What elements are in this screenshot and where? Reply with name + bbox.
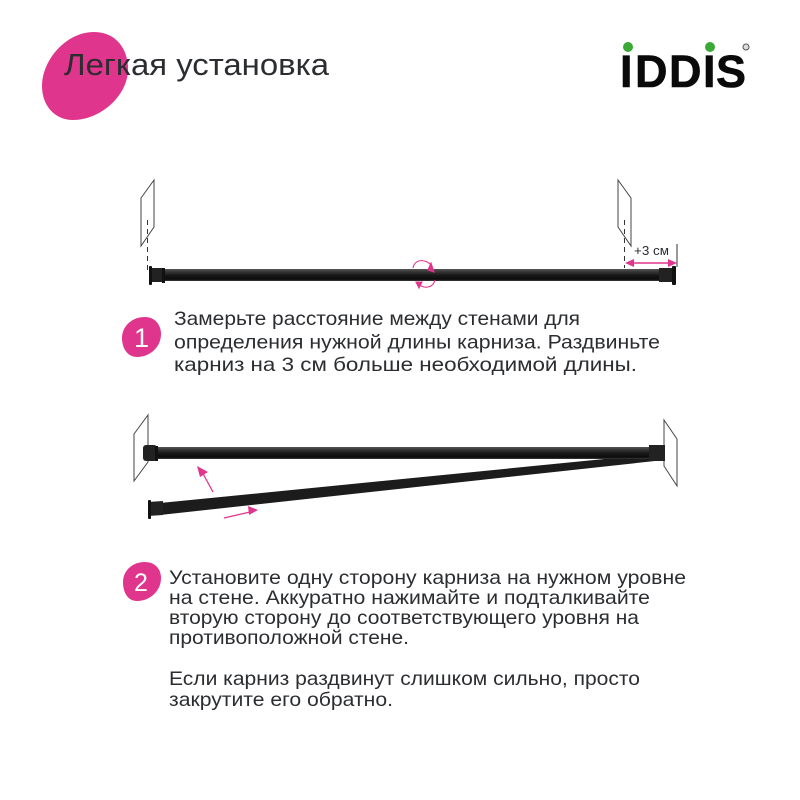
step 1 text: карниз на 3 см больше необходимой длины. [174, 354, 637, 376]
note text: Если карниз раздвинут слишком сильно, просто [169, 668, 640, 690]
diagram 1: rod measurement [141, 180, 677, 288]
note text: закрутите его обратно. [169, 689, 393, 711]
rod [149, 266, 676, 285]
step 2 text: противоположной стене. [169, 627, 409, 649]
wall right [664, 420, 677, 486]
step 1 text: определения нужной длины карниза. Раздвиньте [174, 332, 660, 354]
step 2 text: Установите одну сторону карниза на нужном уровне [169, 567, 686, 589]
logo: IDDIS: IDDIS [620, 46, 746, 97]
step 1 text: Замерьте расстояние между стенами для [174, 308, 580, 330]
step 1 text [174, 308, 660, 376]
title: Легкая установка [64, 48, 329, 82]
note text [169, 668, 640, 711]
horizontal rod [143, 445, 665, 461]
dimension: +3 см: +3 см [634, 244, 669, 258]
step 1 badge [122, 317, 161, 357]
step 1 badge: 1 [134, 323, 149, 353]
heading blob [42, 32, 128, 120]
step 2 badge: 2 [134, 569, 148, 597]
arrow up-left [197, 466, 213, 492]
wall left [134, 415, 148, 481]
dashed guides [148, 220, 624, 270]
step 2 text: вторую сторону до соответствующего уровня на [169, 607, 639, 629]
angled rod [148, 454, 655, 519]
diagram 2: installing rod [134, 415, 677, 519]
step 2 text: на стене. Аккуратно нажимайте и подталкивайте [169, 587, 650, 609]
wall right [618, 180, 631, 246]
dimension: +3 см [625, 244, 677, 267]
arrow right [224, 506, 258, 518]
wall left [141, 180, 154, 246]
step 2 text [169, 567, 686, 649]
rotation arrows [413, 261, 435, 288]
step 2 badge [123, 562, 161, 601]
